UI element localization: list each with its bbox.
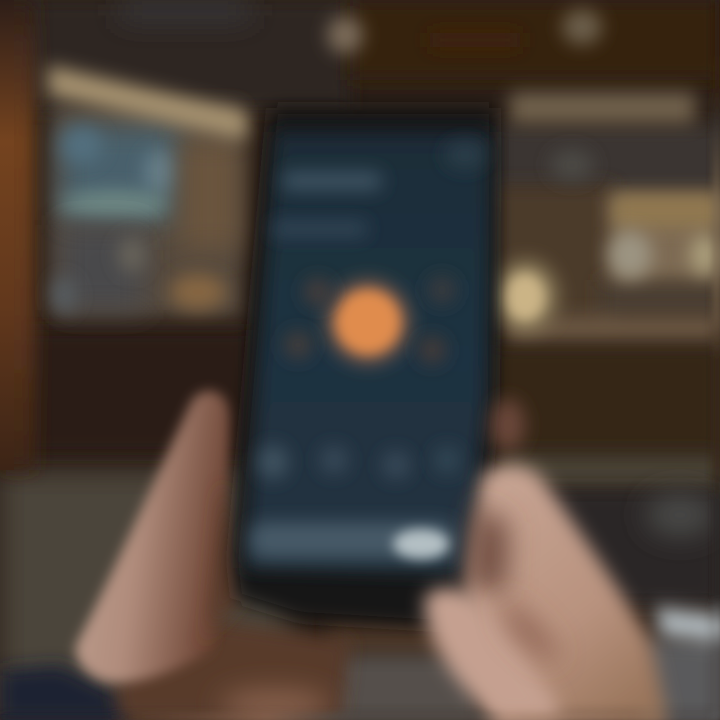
left hand and wrist <box>0 391 350 720</box>
lower palm <box>115 620 350 720</box>
phone body <box>232 108 495 628</box>
left window <box>48 65 248 317</box>
smartphone <box>232 108 495 628</box>
right wall details <box>494 92 720 340</box>
surrounding icons <box>284 276 456 364</box>
screen heading text <box>282 172 382 190</box>
palm <box>465 465 668 720</box>
bottom bar <box>250 522 455 558</box>
bottom icon row <box>258 445 460 479</box>
shadow between fingers <box>500 595 558 662</box>
front finger <box>424 588 560 720</box>
white table edge <box>655 606 720 644</box>
white button <box>393 529 449 559</box>
left fingers <box>76 391 230 683</box>
ceiling lights <box>327 9 602 54</box>
sleeve <box>0 665 130 720</box>
orange sun icon <box>326 280 410 364</box>
reddish shadow beside phone <box>470 505 508 590</box>
right hand <box>424 399 668 720</box>
fingertip behind phone edge <box>491 399 525 451</box>
phone screen <box>245 132 490 574</box>
wooden column <box>0 0 35 470</box>
